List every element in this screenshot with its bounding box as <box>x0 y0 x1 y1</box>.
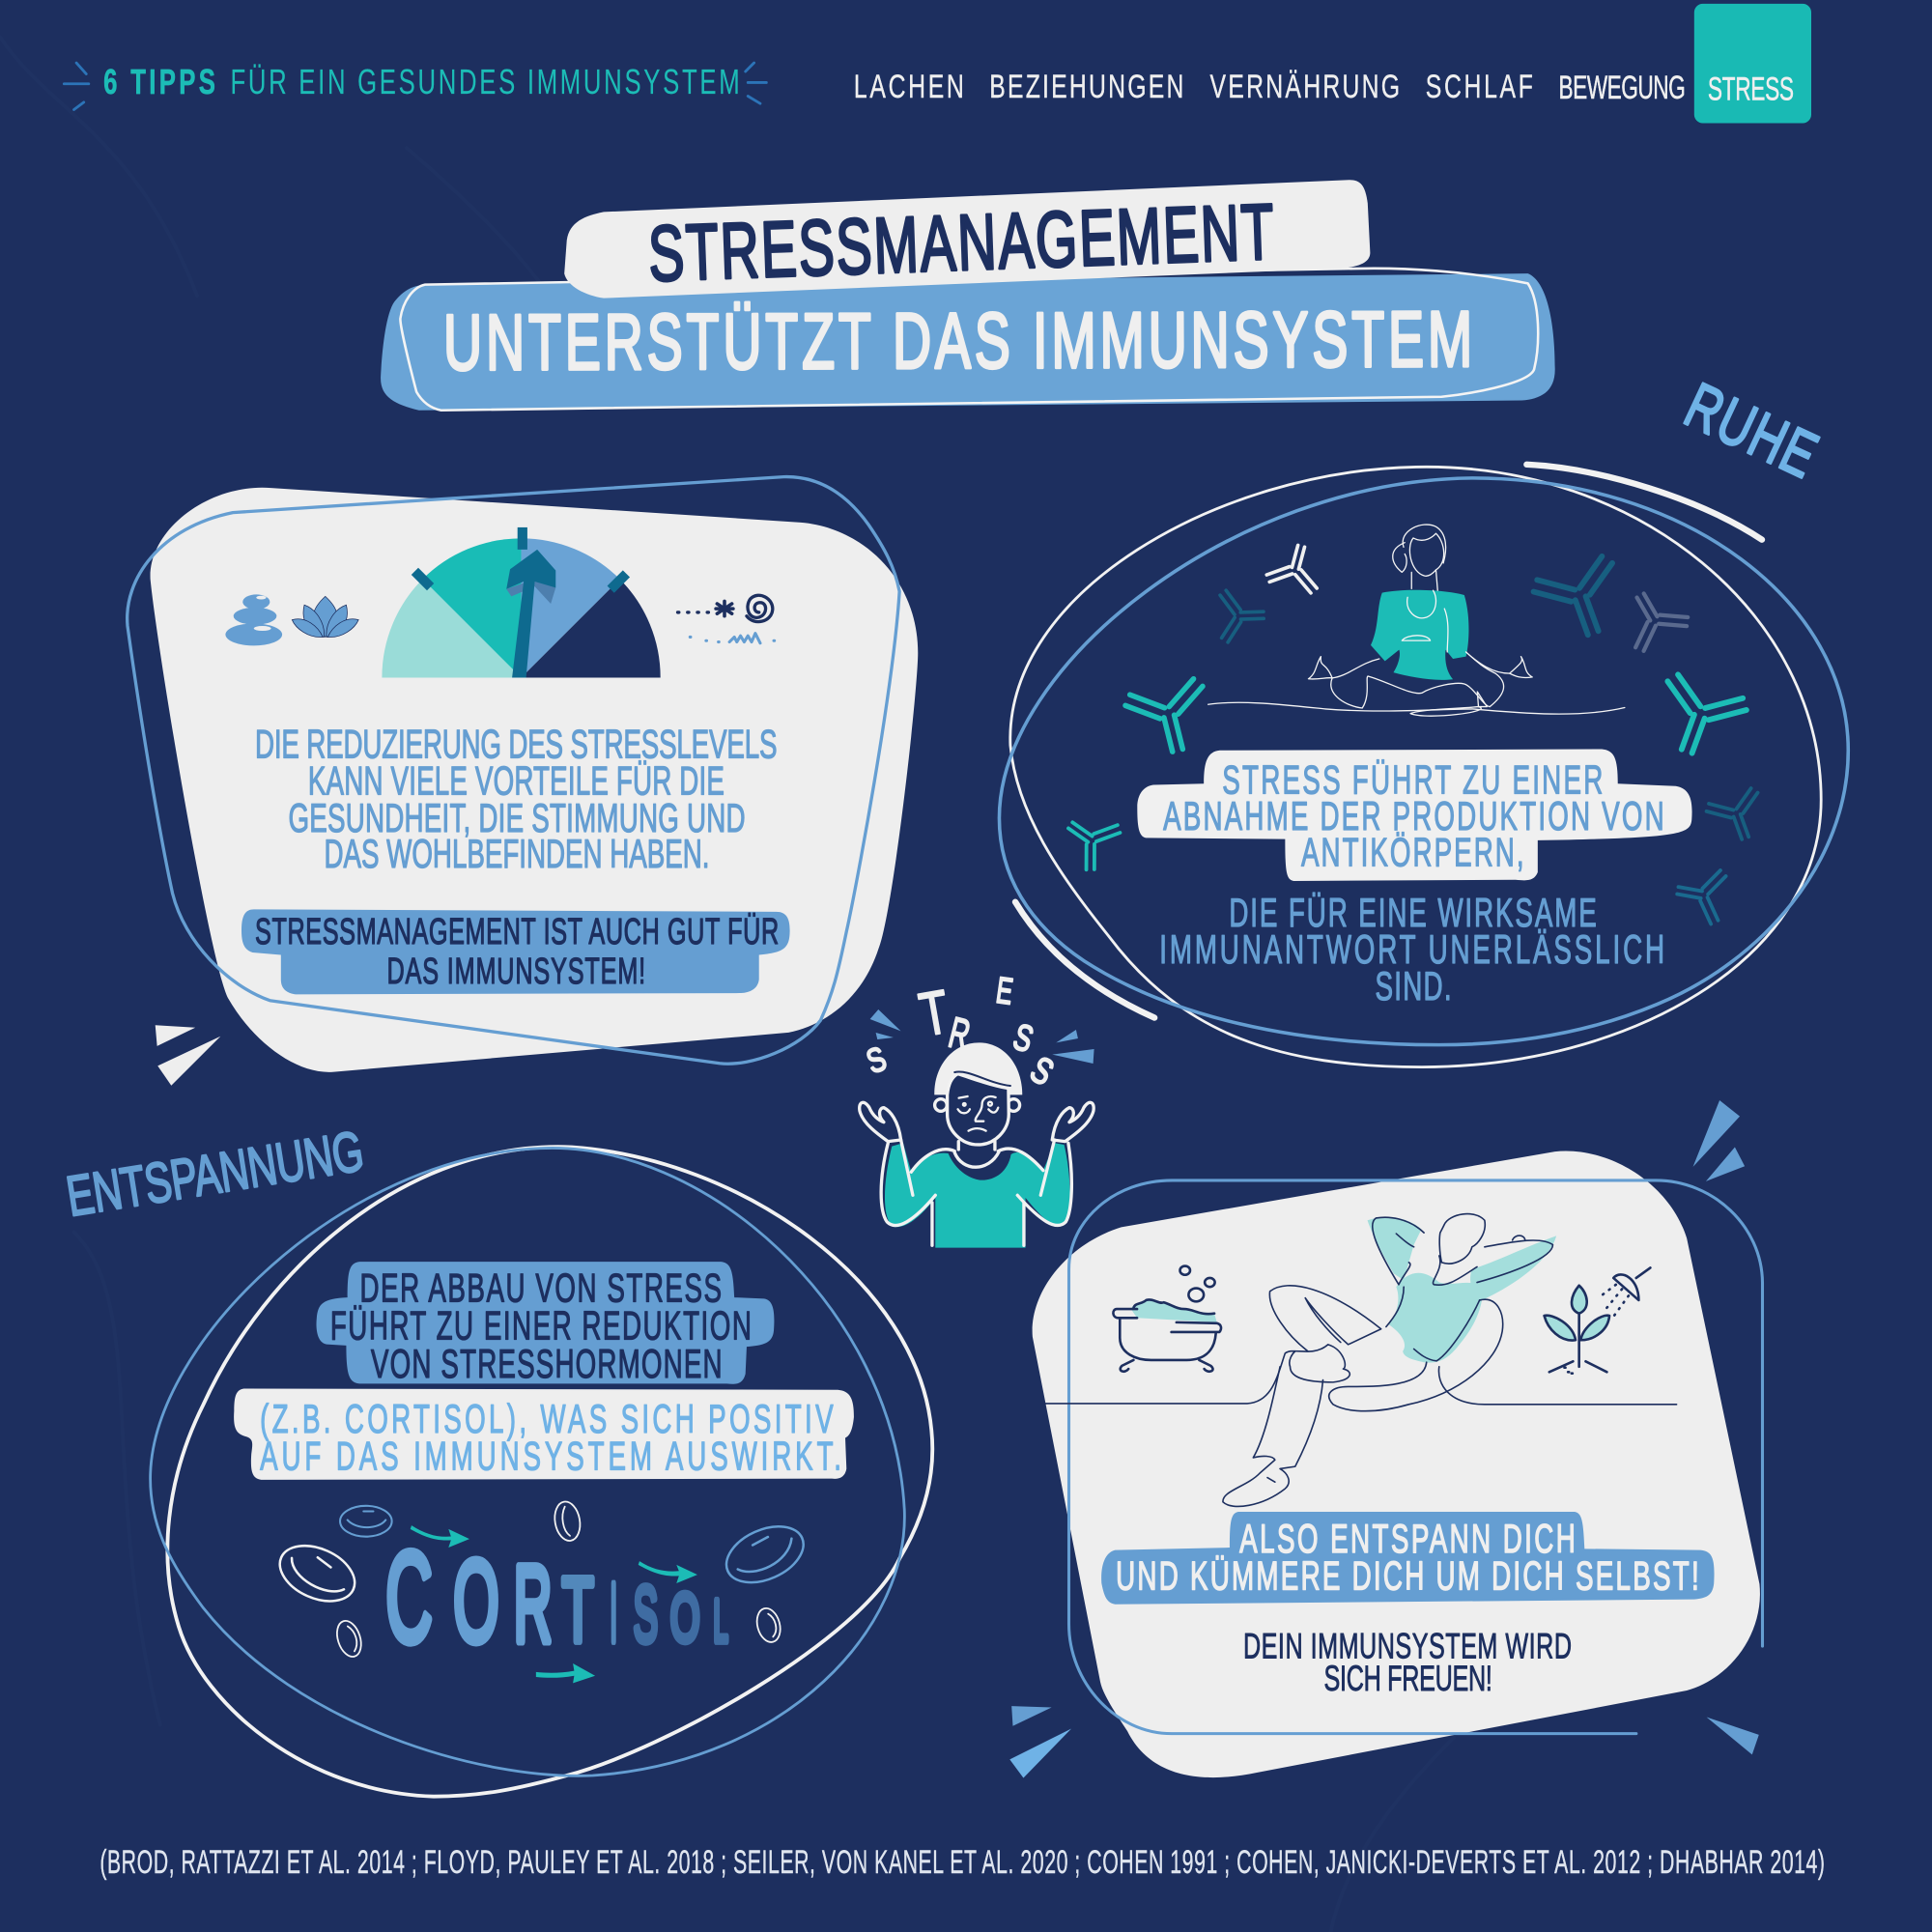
chart: stress gauge <box>382 527 661 678</box>
navigation tabs: STRESS <box>1708 71 1794 108</box>
panel: relaxation and cortisol: L <box>714 1588 728 1654</box>
callout: cortisol effect <box>234 1389 854 1480</box>
text block: immune response: DIE FÜR EINE WIRKSAME <box>1229 890 1597 936</box>
text block: benefits: DIE REDUZIERUNG DES STRESSLEVELS <box>255 722 777 767</box>
text block: benefits: DAS WOHLBEFINDEN HABEN. <box>324 831 709 876</box>
icon: stressed man: R <box>945 1008 975 1060</box>
header: tips label <box>64 63 766 110</box>
text: cortisol word: T <box>562 1560 594 1662</box>
navigation tabs: BEZIEHUNGEN <box>989 69 1183 105</box>
text block: sources: (BROD, RATTAZZI ET AL. 2014 ; FLOYD, PAULEY ET AL. 2018 ; SEILER, VON KANEL ET AL. 2020 ; COHEN 1991 ; COHEN, JANICKI-DEVERTS ET AL. 2012 ; DHABHAR 2014) <box>99 1844 1825 1881</box>
callout: good for immune system: DAS IMMUNSYSTEM! <box>387 951 645 991</box>
icon: meditating woman <box>1208 525 1625 716</box>
heading: Ruhe: RUHE <box>1674 370 1828 492</box>
panel: relaxation and cortisol <box>62 1119 932 1797</box>
text block: benefits <box>255 722 777 876</box>
callout: good for immune system: STRESSMANAGEMENT IST AUCH GUT FÜR <box>255 911 779 952</box>
navigation tabs: SCHLAF <box>1426 69 1533 105</box>
text block: your immune system <box>1243 1626 1572 1698</box>
callout: antibody production: STRESS FÜHRT ZU EINER <box>1222 757 1603 803</box>
header: tips label: 6 TIPPS <box>103 63 215 101</box>
text block: benefits: GESUNDHEIT, DIE STIMMUNG UND <box>288 795 746 840</box>
icon: accent triangles <box>156 1025 220 1086</box>
icon: accent triangles <box>1009 1100 1759 1778</box>
icon: antibodies <box>1055 539 1771 925</box>
callout: relax and take care: ALSO ENTSPANN DICH <box>1239 1516 1576 1561</box>
title <box>381 180 1555 411</box>
icon: stressed man: S <box>1023 1049 1061 1094</box>
text block: immune response: IMMUNANTWORT UNERLÄSSLICH <box>1159 926 1664 972</box>
text: cortisol word: I <box>610 1566 617 1660</box>
text block: your immune system: SICH FREUEN! <box>1324 1658 1492 1698</box>
icon: bathtub <box>1113 1266 1221 1372</box>
callout: relax and take care <box>1101 1512 1715 1605</box>
text: cortisol word: O <box>670 1579 699 1656</box>
callout: good for immune system <box>242 909 790 994</box>
icon: stressed man: T <box>915 977 954 1049</box>
title: UNTERSTÜTZT DAS IMMUNSYSTEM <box>443 295 1472 386</box>
navigation tabs: VERNÄHRUNG <box>1210 69 1400 105</box>
icon: watered plant <box>1545 1267 1650 1374</box>
icon: stressed man: S <box>862 1039 892 1081</box>
panel: stress level gauge and benefits <box>128 477 918 1086</box>
icon: relaxing man <box>1042 1214 1677 1506</box>
icon: stressed man: S <box>1009 1016 1038 1061</box>
text block: stress hormones: DER ABBAU VON STRESS <box>359 1265 722 1311</box>
icon: blood cells <box>271 1499 812 1660</box>
callout: cortisol effect: (Z.B. CORTISOL), WAS SICH POSITIV <box>260 1396 834 1441</box>
navigation tabs <box>854 4 1811 124</box>
panel: relax and take care <box>1009 1100 1762 1778</box>
text block: immune response: SIND. <box>1375 963 1452 1009</box>
text block: benefits: KANN VIELE VORTEILE FÜR DIE <box>308 758 724 804</box>
callout: antibody production <box>1137 750 1692 881</box>
icon: stones and lotus <box>225 594 358 645</box>
text block: stress hormones <box>316 1262 774 1386</box>
text block: immune response <box>1159 890 1664 1009</box>
text block: stress hormones: FÜHRT ZU EINER REDUKTION <box>330 1303 752 1349</box>
callout: antibody production: ABNAHME DER PRODUKTION VON <box>1163 793 1664 838</box>
text: cortisol word: S <box>634 1571 658 1659</box>
text: cortisol word: R <box>514 1543 552 1664</box>
icon: calm squiggles <box>678 595 775 643</box>
arrow: cortisol flow <box>411 1525 697 1683</box>
heading: Entspannung: ENTSPANNUNG <box>62 1119 368 1229</box>
callout: cortisol effect: AUF DAS IMMUNSYSTEM AUSWIRKT. <box>260 1434 841 1479</box>
panel: rest and antibodies <box>999 370 1848 1067</box>
text block: your immune system: DEIN IMMUNSYSTEM WIRD <box>1243 1626 1572 1666</box>
title: STRESSMANAGEMENT <box>647 187 1275 298</box>
text block: stress hormones: VON STRESSHORMONEN <box>371 1341 723 1386</box>
text: cortisol word: C <box>385 1526 433 1669</box>
navigation tabs: BEWEGUNG <box>1559 71 1686 106</box>
icon: stressed man <box>860 970 1094 1248</box>
navigation tabs: LACHEN <box>854 69 964 105</box>
text: cortisol word: O <box>453 1537 499 1666</box>
icon: stressed man: E <box>994 970 1015 1013</box>
callout: antibody production: ANTIKÖRPERN, <box>1301 830 1524 875</box>
callout: relax and take care: UND KÜMMERE DICH UM DICH SELBST! <box>1116 1553 1699 1599</box>
header: tips label: FÜR EIN GESUNDES IMMUNSYSTEM <box>231 63 740 101</box>
text: cortisol word <box>385 1526 728 1669</box>
